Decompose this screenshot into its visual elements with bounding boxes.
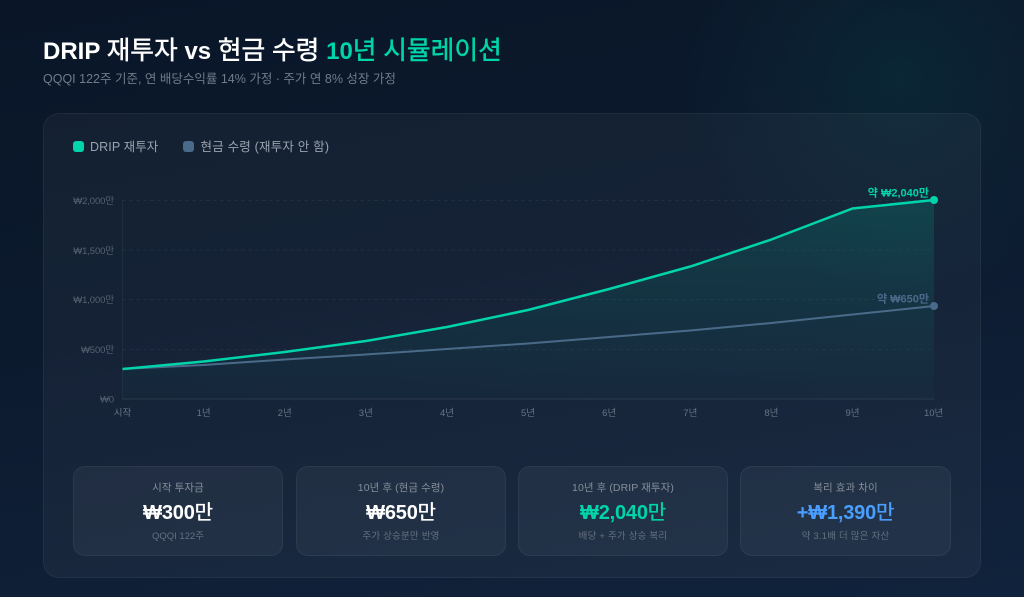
card label: 복리 효과 차이 (813, 482, 878, 494)
card label: 10년 후 (DRIP 재투자) (572, 482, 674, 494)
x axis labels: 3년 (359, 408, 373, 419)
y axis labels: ₩2,000만 (73, 196, 114, 207)
y axis labels: ₩500만 (81, 345, 114, 356)
stat card: start (73, 466, 283, 556)
y axis labels: ₩0 (100, 394, 114, 406)
x axis labels: 10년 (924, 408, 943, 419)
card value: ₩2,040만 (580, 502, 666, 524)
legend item: cash (183, 141, 194, 152)
card value: ₩300만 (143, 502, 213, 524)
DRIP end point (930, 196, 938, 204)
y axis labels: ₩1,500만 (73, 246, 114, 257)
x axis labels: 9년 (845, 408, 860, 419)
x axis labels: 시작 (114, 408, 131, 419)
y axis labels (73, 196, 114, 406)
card note: 약 3.1배 더 많은 자산 (802, 530, 889, 542)
x axis labels: 2년 (278, 408, 292, 419)
cash line (122, 306, 934, 369)
x axis labels: 5년 (521, 408, 535, 419)
legend label: cash: 현금 수령 (재투자 안 함) (200, 140, 329, 154)
card value: ₩650만 (366, 502, 436, 524)
card note: 배당 + 주가 상승 복리 (579, 530, 667, 542)
title: DRIP 재투자 vs 현금 수령 10년 시뮬레이션 (43, 37, 502, 65)
x axis labels: 7년 (683, 408, 697, 419)
cash end label: 약 ₩650만 (877, 292, 929, 306)
legend (73, 140, 329, 154)
area under DRIP line (122, 200, 934, 399)
y axis labels: ₩1,000만 (73, 295, 114, 306)
panel: chart container (43, 113, 981, 578)
card note: 주가 상승분만 반영 (362, 530, 440, 542)
stat card: cash (296, 466, 506, 556)
card label: 시작 투자금 (152, 482, 204, 494)
x axis labels: 6년 (602, 408, 616, 419)
x axis labels: 4년 (440, 408, 454, 419)
subtitle: QQQI 122주 기준, 연 배당수익률 14% 가정 · 주가 연 8% 성장 가정 (43, 72, 396, 86)
cash end point (930, 302, 938, 310)
x axis labels: 1년 (197, 408, 211, 419)
legend item: DRIP (73, 141, 84, 152)
stat card: DRIP (518, 466, 728, 556)
x axis labels: 8년 (764, 408, 778, 419)
stat card: difference (740, 466, 951, 556)
card label: 10년 후 (현금 수령) (358, 482, 444, 494)
legend label: DRIP: DRIP 재투자 (90, 140, 158, 154)
x axis labels (114, 408, 943, 419)
card note: QQQI 122주 (152, 530, 204, 542)
card value: +₩1,390만 (797, 502, 894, 524)
DRIP line (122, 200, 934, 369)
DRIP end label: 약 ₩2,040만 (868, 186, 929, 200)
